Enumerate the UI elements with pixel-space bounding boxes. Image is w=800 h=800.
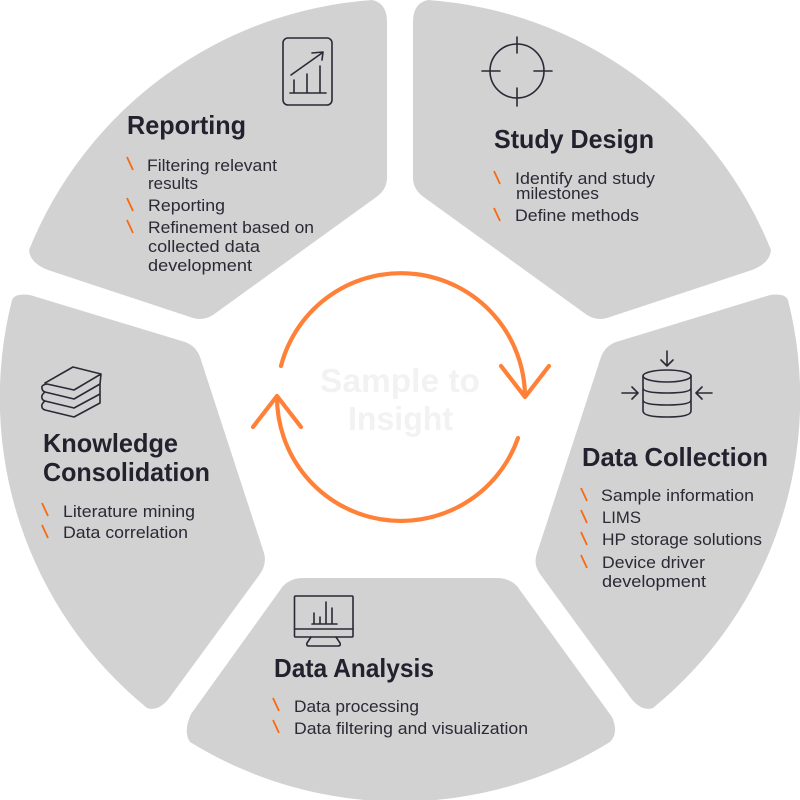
center title [320,362,480,437]
list: study design items: Identify and study [515,169,656,188]
heading: knowledge consolidation: Consolidation [43,457,210,487]
list: data analysis items: Data processing [294,697,419,716]
segment shape: study design [413,0,771,319]
icon: database with arrows [622,351,712,417]
list: reporting items: results [148,174,198,193]
arrow: top clockwise arc [281,273,549,397]
heading: data collection: Data Collection [582,442,768,472]
list: reporting items: collected data [148,237,261,256]
list: data analysis items: Data filtering and visualization [294,719,528,738]
list: data analysis items [273,697,528,738]
panel: reporting [29,0,387,319]
list: reporting items: development [148,256,252,275]
list: reporting items: Filtering relevant [147,156,277,175]
heading: data analysis: Data Analysis [274,653,434,683]
center title: Sample to [320,362,480,399]
list: data collection items: Device driver [602,553,705,572]
list: knowledge consolidation items [42,502,195,542]
arrow: bottom clockwise arc [253,396,518,521]
heading: study design: Study Design [494,124,654,154]
list: knowledge consolidation items: Data correlation [63,523,188,542]
icon: stack of books [42,367,101,417]
icon: monitor with chart [294,596,353,646]
list: study design items: milestones [516,184,599,203]
list: study design items: Define methods [515,206,639,225]
icon: target crosshair [482,37,552,106]
list: reporting items: Reporting [148,196,225,215]
list: data collection items: development [602,572,706,591]
icon: report chart [283,38,332,105]
segment shape: knowledge consolidation [0,295,265,709]
segment shape: data collection [536,295,800,709]
list: study design items [494,169,656,225]
segment shape: reporting [29,0,387,319]
heading: knowledge consolidation: Knowledge [43,428,178,458]
heading: reporting: Reporting [127,110,246,140]
list: reporting items: Refinement based on [148,218,314,237]
list: data collection items: Sample information [601,486,754,505]
panel: study design [413,0,771,319]
center title: Insight [348,400,453,437]
panel: data collection [536,295,800,709]
panel: knowledge consolidation [0,295,265,709]
list: data collection items: LIMS [602,508,641,527]
center cycle arrows [253,273,549,521]
list: reporting items [127,156,314,275]
list: knowledge consolidation items: Literature mining [63,502,195,521]
list: data collection items [581,486,762,591]
heading: knowledge consolidation [43,428,210,487]
panel: data analysis [187,578,615,800]
segment shape: data analysis [187,578,615,800]
list: data collection items: HP storage solutions [602,530,762,549]
